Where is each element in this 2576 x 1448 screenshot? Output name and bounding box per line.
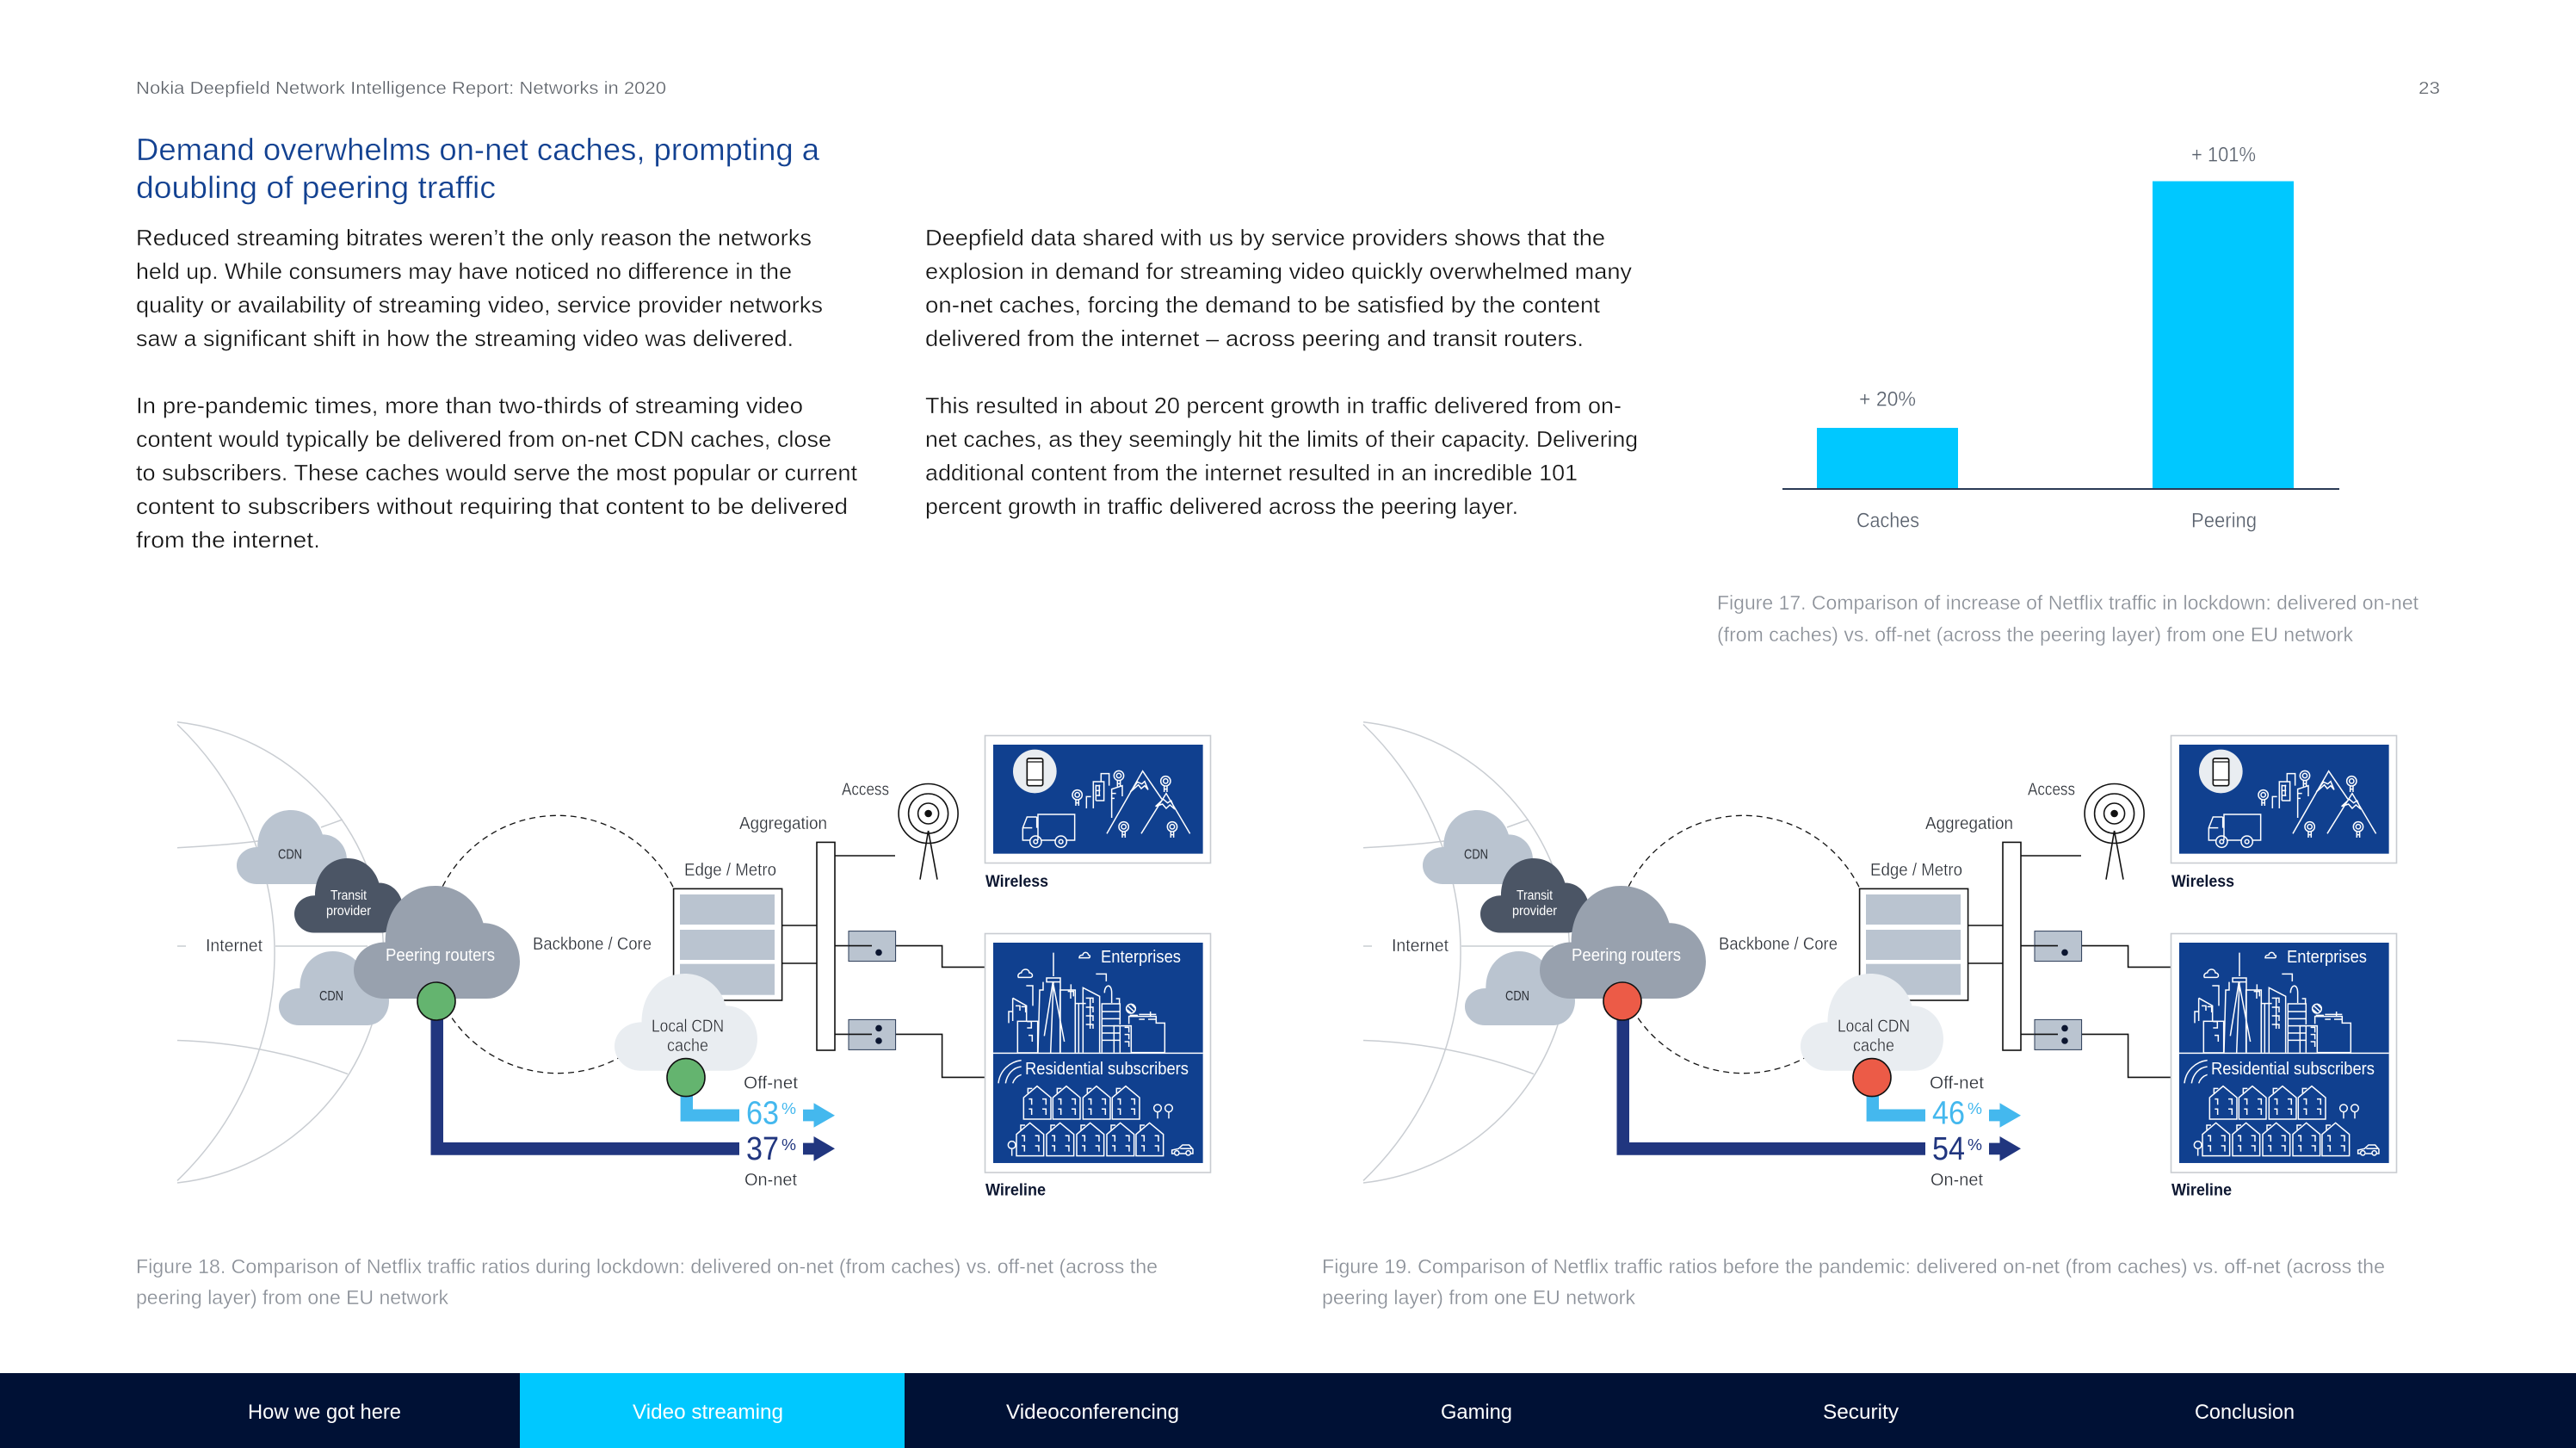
cloud: peering routers: Peering routers xyxy=(1572,946,1681,965)
cloud: local CDN cache: Local CDN xyxy=(652,1018,724,1036)
title: doubling of peering traffic xyxy=(136,170,496,205)
panel: wireline xyxy=(985,933,1210,1173)
panel: wireline: Enterprises xyxy=(2287,948,2367,967)
value: on-net 54 percent: 54 xyxy=(1932,1131,1965,1167)
diagram: figure 19 network before pandemic xyxy=(1363,722,2396,1200)
caption: figure 19: Figure 19. Comparison of Netflix traffic ratios before the pandemic: delivered on-net (from caches) vs. off-net (across the xyxy=(1322,1255,2385,1278)
label: off-net: Off-net xyxy=(1930,1074,1984,1093)
page number: 23 xyxy=(2418,79,2440,98)
axis label: caches: Caches xyxy=(1856,510,1919,532)
body text column 1: Reduced streaming bitrates weren’t the only reason the networks xyxy=(136,225,812,251)
body text column 2: additional content from the internet resulted in an incredible 101 xyxy=(925,460,1578,486)
label: access: Access xyxy=(842,781,889,800)
body text column 1: held up. While consumers may have noticed no difference in the xyxy=(136,258,792,284)
panel: wireless xyxy=(985,735,1210,863)
label: aggregation: Aggregation xyxy=(1925,814,2013,833)
footer navigation bar xyxy=(0,1373,2576,1448)
nav: videoconferencing: Videoconferencing xyxy=(1006,1401,1179,1424)
node: peering status xyxy=(417,982,455,1020)
cloud: local CDN cache: cache xyxy=(1853,1036,1894,1055)
icon: antenna xyxy=(2085,783,2144,880)
body text column 2: This resulted in about 20 percent growth in traffic delivered from on- xyxy=(925,393,1622,418)
caption: figure 19 xyxy=(1322,1255,2385,1309)
body text column 1 xyxy=(136,225,858,553)
cloud: CDN lower xyxy=(1465,951,1575,1025)
globe: internet xyxy=(1363,722,1570,1183)
nav: conclusion: Conclusion xyxy=(2195,1401,2295,1424)
node: cache status xyxy=(1853,1059,1891,1097)
panel: wireline: Enterprises xyxy=(1101,948,1181,967)
cloud: peering routers xyxy=(1540,886,1706,999)
edge metro box xyxy=(1860,888,1968,1000)
label: wireless: Wireless xyxy=(2171,873,2234,891)
label: aggregation: Aggregation xyxy=(739,814,827,833)
value: off-net 46 percent: % xyxy=(1968,1100,1982,1117)
cloud: transit provider xyxy=(294,858,403,933)
cloud: transit provider: provider xyxy=(1512,904,1558,919)
body text column 2: Deepfield data shared with us by service providers shows that the xyxy=(925,225,1605,251)
cloud: local CDN cache: Local CDN xyxy=(1838,1018,1910,1036)
cloud: transit provider: Transit xyxy=(1517,888,1553,903)
label: internet: Internet xyxy=(206,937,263,956)
title: Demand overwhelms on-net caches, prompting a xyxy=(136,132,820,167)
off-net route line xyxy=(681,1078,739,1122)
cloud: local CDN cache xyxy=(1801,974,1943,1071)
bar: peering xyxy=(2153,181,2294,489)
cloud: peering routers xyxy=(354,886,520,999)
body text column 1: quality or availability of streaming video, service provider networks xyxy=(136,292,823,318)
body text column 1: content to subscribers without requiring that content to be delivered xyxy=(136,493,848,519)
cloud: transit provider: Transit xyxy=(330,888,367,903)
value: off-net 46 percent: 46 xyxy=(1932,1095,1965,1131)
bar chart: figure 17 xyxy=(1782,143,2339,532)
globe: internet xyxy=(177,722,384,1183)
body text column 2 xyxy=(925,225,1638,519)
arrow: on-net xyxy=(803,1136,835,1161)
edge metro box xyxy=(674,888,782,1000)
caption: figure 17: Figure 17. Comparison of increase of Netflix traffic in lockdown: delivered on-net xyxy=(1717,591,2419,614)
cloud: transit provider xyxy=(1480,858,1589,933)
arrow: on-net xyxy=(1989,1136,2021,1161)
body text column 1: In pre-pandemic times, more than two-thirds of streaming video xyxy=(136,393,803,418)
label: internet: Internet xyxy=(1392,937,1449,956)
label: on-net: On-net xyxy=(744,1171,797,1190)
title xyxy=(136,132,820,205)
body text column 2: explosion in demand for streaming video quickly overwhelmed many xyxy=(925,258,1632,284)
value: on-net 37 percent: 37 xyxy=(746,1131,779,1167)
body text column 1: saw a significant shift in how the streaming video was delivered. xyxy=(136,325,794,351)
caption: figure 18: Figure 18. Comparison of Netflix traffic ratios during lockdown: delivered on-net (from caches) vs. off-net (across the xyxy=(136,1255,1158,1278)
diagram: figure 18 network during lockdown xyxy=(177,722,1210,1200)
report header: Nokia Deepfield Network Intelligence Report: Networks in 2020 xyxy=(136,79,666,98)
value: on-net 54 percent: % xyxy=(1968,1136,1982,1154)
body text column 1: to subscribers. These caches would serve the most popular or current xyxy=(136,460,858,486)
caption: figure 17: (from caches) vs. off-net (across the peering layer) from one EU network xyxy=(1717,623,2353,646)
panel: wireline xyxy=(2171,933,2396,1173)
label: edge metro: Edge / Metro xyxy=(684,861,776,880)
active tab highlight xyxy=(520,1373,905,1448)
aggregation bar and connectors xyxy=(781,842,985,1077)
switch: lower xyxy=(849,1019,896,1049)
arrow: off-net xyxy=(1989,1103,2021,1128)
node: cache status xyxy=(667,1059,705,1097)
panel: wireline: Residential subscribers xyxy=(1025,1060,1189,1079)
on-net route line xyxy=(1616,1001,1925,1155)
panel: wireless xyxy=(2171,735,2396,863)
off-net route line xyxy=(1867,1078,1925,1122)
switch: upper xyxy=(2035,931,2082,962)
cloud: CDN lower xyxy=(279,951,389,1025)
cloud: CDN lower: CDN xyxy=(1505,989,1529,1004)
caption: figure 19: peering layer) from one EU network xyxy=(1322,1286,1635,1309)
label: on-net: On-net xyxy=(1930,1171,1983,1190)
label: backbone: Backbone / Core xyxy=(1719,935,1838,954)
value: off-net 63 percent: 63 xyxy=(746,1095,779,1131)
caption: figure 17 xyxy=(1717,591,2419,646)
node: peering status xyxy=(1603,982,1641,1020)
label: access: Access xyxy=(2028,781,2075,800)
cloud: peering routers: Peering routers xyxy=(386,946,495,965)
on-net route line xyxy=(430,1001,739,1155)
nav: how we got here: How we got here xyxy=(248,1401,401,1424)
cloud: CDN lower: CDN xyxy=(319,989,343,1004)
bar: caches xyxy=(1817,428,1958,489)
cloud: CDN upper xyxy=(237,810,347,884)
nav: video streaming: Video streaming xyxy=(633,1401,783,1424)
cloud: CDN upper xyxy=(1423,810,1533,884)
value label: peering: + 101% xyxy=(2191,143,2256,167)
nav: security: Security xyxy=(1823,1401,1899,1424)
panel: wireline: Residential subscribers xyxy=(2211,1060,2375,1079)
nav: gaming: Gaming xyxy=(1441,1401,1512,1424)
arrow: off-net xyxy=(803,1103,835,1128)
value label: caches: + 20% xyxy=(1859,387,1916,412)
label: backbone: Backbone / Core xyxy=(533,935,652,954)
body text column 2: percent growth in traffic delivered across the peering layer. xyxy=(925,493,1518,519)
body text column 2: net caches, as they seemingly hit the limits of their capacity. Delivering xyxy=(925,426,1638,452)
cloud: local CDN cache: cache xyxy=(667,1036,708,1055)
value: on-net 37 percent: % xyxy=(781,1136,796,1154)
caption: figure 18: peering layer) from one EU network xyxy=(136,1286,448,1309)
cloud: transit provider: provider xyxy=(326,904,372,919)
label: edge metro: Edge / Metro xyxy=(1870,861,1962,880)
body text column 2: on-net caches, forcing the demand to be satisfied by the content xyxy=(925,292,1601,318)
switch: upper xyxy=(849,931,896,962)
label: wireline: Wireline xyxy=(985,1182,1046,1200)
switch: lower xyxy=(2035,1019,2082,1049)
label: wireless: Wireless xyxy=(985,873,1048,891)
caption: figure 18 xyxy=(136,1255,1158,1309)
axis label: peering: Peering xyxy=(2191,510,2257,532)
cloud: CDN upper: CDN xyxy=(278,848,302,863)
label: off-net: Off-net xyxy=(744,1074,798,1093)
body text column 1: content would typically be delivered from on-net CDN caches, close xyxy=(136,426,831,452)
aggregation bar and connectors xyxy=(1968,842,2171,1077)
cloud: CDN upper: CDN xyxy=(1464,848,1488,863)
icon: antenna xyxy=(899,783,958,880)
label: wireline: Wireline xyxy=(2171,1182,2232,1200)
body text column 2: delivered from the internet – across peering and transit routers. xyxy=(925,325,1584,351)
body text column 1: from the internet. xyxy=(136,527,320,553)
cloud: local CDN cache xyxy=(615,974,757,1071)
value: off-net 63 percent: % xyxy=(781,1100,796,1117)
